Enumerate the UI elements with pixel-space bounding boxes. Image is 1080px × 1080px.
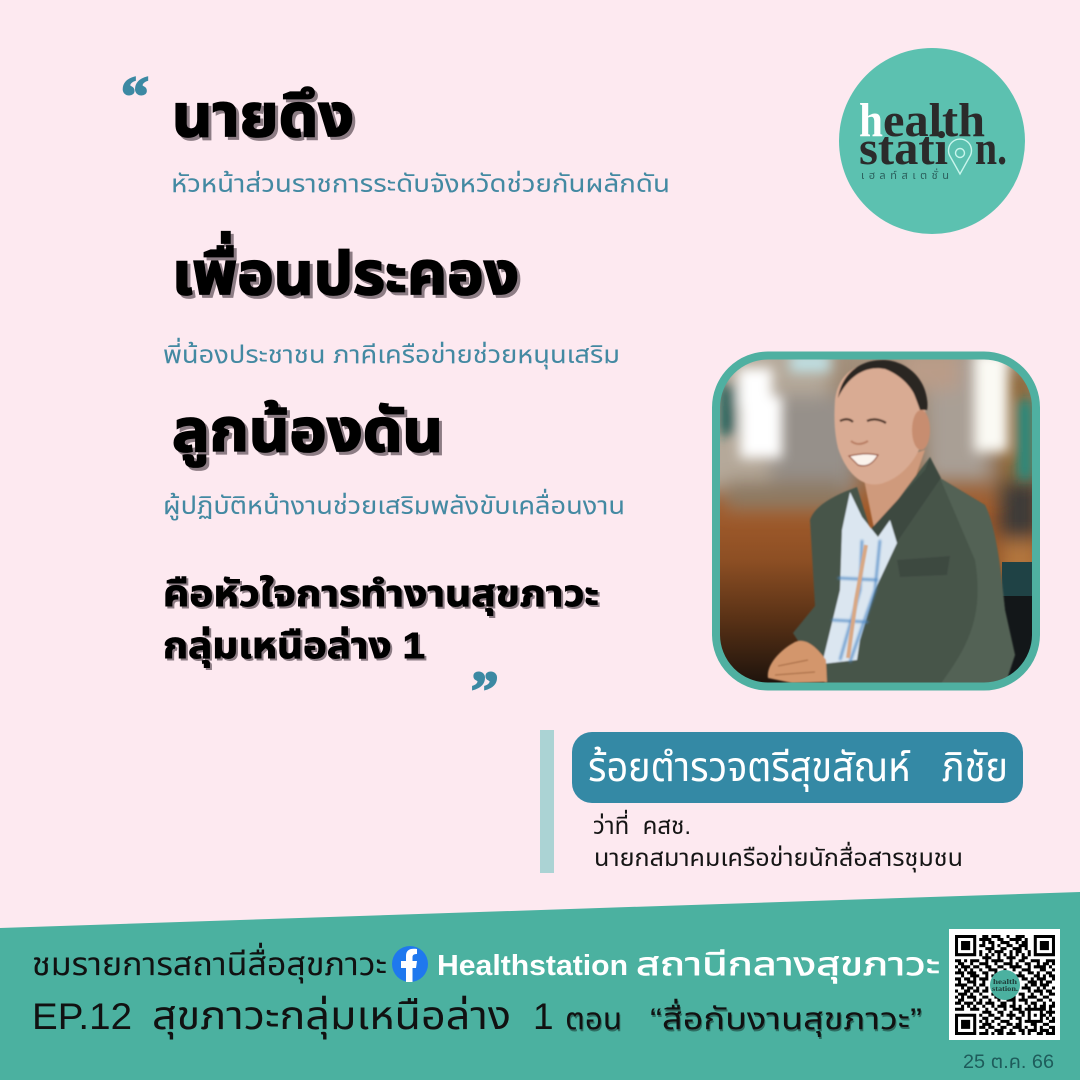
logo: health station: เฮลท์สเตชั่น (861, 168, 949, 182)
subtext: นายดึง: หัวหน้าส่วนราชการระดับจังหวัดช่วยกันผลักดัน (171, 170, 670, 198)
footer line 2: title: ตอน (565, 1003, 622, 1036)
footer line 2: episode: EP.12 (32, 996, 132, 1037)
statement line 2: กลุ่มเหนือล่าง 1 (163, 625, 425, 667)
logo: health station: ealth (883, 94, 985, 147)
statement line 1: คือหัวใจการทำงานสุขภาวะ (163, 573, 599, 615)
heading: เพื่อนประคอง: เพื่อนประคอง (172, 231, 519, 307)
QR code (949, 929, 1060, 1040)
QR code: health (993, 978, 1017, 986)
date: 25 ต.ค. 66 (963, 1052, 1054, 1073)
logo: health station (839, 48, 1025, 234)
hair (838, 360, 928, 398)
footer line 1: station name: สถานีกลางสุขภาวะ (636, 946, 940, 983)
logo: health station: n. (975, 122, 1007, 175)
footer line 2: episode (32, 995, 554, 1039)
opening quote mark: “ (121, 66, 149, 128)
heading: นายดึง: นายดึง (172, 82, 354, 149)
heading: ลูกน้องดัน: ลูกน้องดัน (172, 397, 443, 467)
speaker organisation: นายกสมาคมเครือข่ายนักสื่อสารชุมชน (594, 841, 963, 873)
footer line 1: programme: ชมรายการสถานีสื่อสุขภาวะ (32, 942, 387, 983)
closing quote mark: ” (471, 660, 498, 721)
footer line 2: title: “สื่อกับงานสุขภาวะ” (650, 998, 922, 1037)
subtext: ลูกน้องดัน: ผู้ปฏิบัติหน้างานช่วยเสริมพลังขับเคลื่อนงาน (163, 488, 625, 521)
ear (912, 410, 930, 450)
QR code: station. (992, 985, 1018, 993)
icon: facebook (392, 946, 428, 982)
speaker role: ว่าที่ คสช. (593, 809, 691, 840)
logo: health station: h (859, 94, 883, 147)
logo: health station: stati (859, 122, 948, 175)
neck (864, 450, 926, 527)
chair (1002, 562, 1032, 596)
jacket (792, 458, 978, 682)
nose shadow (851, 441, 868, 444)
name badge (572, 732, 1023, 803)
subtext: เพื่อนประคอง: พี่น้องประชาชน ภาคีเครือข่ายช่วยหนุนเสริม (163, 337, 620, 370)
icon: location pin (948, 139, 972, 174)
footer line 2: episode: 1 (533, 996, 554, 1037)
footer band (0, 892, 1080, 1080)
footer line 2: title (565, 998, 922, 1037)
accent bar (540, 730, 554, 873)
head (834, 363, 926, 485)
photo: smiling man in green jacket (700, 340, 1040, 686)
footer line 1: Healthstation: Healthstation (437, 950, 628, 982)
name badge: ร้อยตำรวจตรีสุขสัณห์ ภิชัย (588, 744, 1008, 792)
footer line 2: episode: สุขภาวะกลุ่มเหนือล่าง (152, 995, 511, 1039)
hands (768, 641, 827, 683)
eyes, brows (840, 419, 886, 423)
shirt (822, 492, 897, 664)
smile (849, 454, 878, 466)
